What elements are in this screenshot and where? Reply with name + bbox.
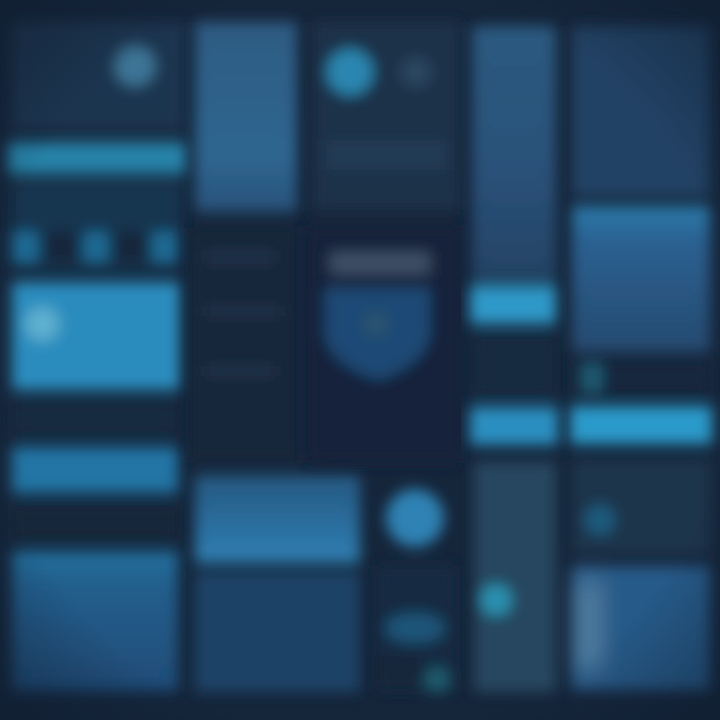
panel: dark strip bbox=[572, 362, 710, 394]
panel: right lower dark card bbox=[572, 460, 710, 554]
panel: fourth column bbox=[470, 26, 558, 692]
icon: bright circle bbox=[386, 489, 444, 547]
panel: dark text column bbox=[190, 228, 298, 462]
bar: cyan highlight right bbox=[570, 406, 712, 444]
panel: right mid card bbox=[572, 206, 710, 352]
panel: icon row bbox=[12, 182, 182, 270]
panel: third column bbox=[305, 22, 460, 693]
panel: top left header bbox=[12, 22, 184, 130]
bar: dark band lower bbox=[12, 503, 178, 539]
panel: dark gap block bbox=[472, 335, 556, 397]
panel: top right card bbox=[572, 26, 710, 196]
bar: cyan button upper bbox=[470, 286, 556, 324]
bar: left highlight bbox=[8, 142, 186, 174]
panel: left column bbox=[8, 22, 186, 691]
bar: mid blue band bbox=[12, 447, 178, 493]
bar: dark divider band bbox=[12, 402, 178, 436]
panel: second column bbox=[190, 22, 360, 692]
panel: dark shield card bbox=[305, 225, 460, 463]
panel: lower list bbox=[474, 462, 556, 692]
panel: wide bottom card bbox=[195, 572, 360, 692]
panel: bottom left card bbox=[12, 551, 178, 691]
panel: bottom right card bbox=[572, 566, 710, 690]
panel: wide lower card bbox=[195, 475, 360, 563]
panel: top centre with circles bbox=[312, 22, 460, 210]
panel: fifth column bbox=[570, 26, 712, 690]
panel: tall upper card bbox=[472, 26, 556, 282]
panel: lower small column bbox=[376, 565, 456, 693]
panel: upper tall card bbox=[195, 22, 297, 212]
bar: cyan button lower bbox=[470, 407, 558, 445]
panel: bright blue card bbox=[12, 282, 180, 390]
